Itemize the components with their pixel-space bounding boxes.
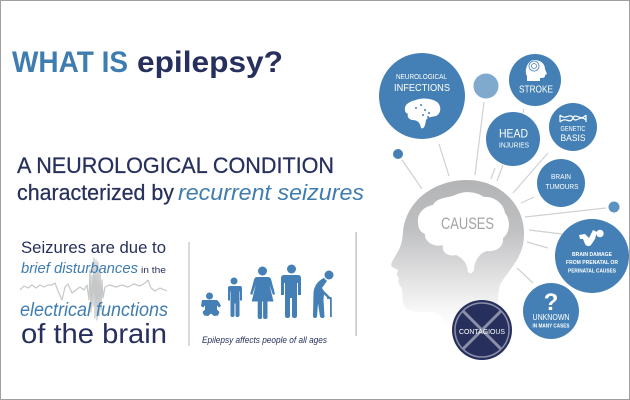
icon: elderly person bbox=[313, 270, 334, 318]
node: unknown bbox=[523, 283, 579, 339]
node: brain damage bbox=[555, 219, 629, 293]
icon: baby bbox=[201, 292, 221, 316]
subtitle: recurrent seizures bbox=[178, 180, 364, 205]
node: neurological infections: INFECTIONS bbox=[394, 82, 450, 94]
title bbox=[12, 46, 283, 79]
node: genetic basis: BASIS bbox=[560, 133, 586, 144]
radiating lines bbox=[402, 102, 606, 283]
node: brain tumours bbox=[537, 159, 585, 207]
node: brain tumours: TUMOURS bbox=[546, 184, 579, 191]
node: brain tumours: BRAIN bbox=[551, 174, 571, 181]
causes label: CAUSES bbox=[441, 215, 494, 233]
caption: Epilepsy affects people of all ages bbox=[202, 335, 327, 346]
seizures text block: electrical functions bbox=[20, 300, 168, 321]
node: small light circle bbox=[474, 74, 498, 98]
subtitle: A NEUROLOGICAL CONDITION bbox=[17, 153, 334, 178]
title: epilepsy? bbox=[137, 46, 283, 79]
node: head injuries bbox=[486, 112, 540, 166]
node: brain damage: FROM PRENATAL OR bbox=[566, 260, 618, 266]
icon: infant bbox=[579, 230, 604, 246]
head silhouette bbox=[391, 180, 524, 325]
icon: dna bbox=[560, 115, 586, 122]
node: neurological infections: NEUROLOGICAL bbox=[396, 74, 447, 81]
icon: brain bbox=[405, 99, 440, 128]
subtitle bbox=[17, 153, 364, 205]
node: not contagious: CONTAGIOUS bbox=[459, 327, 505, 336]
seizures text block: in the bbox=[141, 265, 166, 276]
node: head injuries: INJURIES bbox=[499, 140, 529, 150]
node: brain damage: BRAIN DAMAGE bbox=[572, 252, 613, 258]
node: unknown: UNKNOWN bbox=[532, 313, 570, 322]
node: unknown: IN MANY CASES bbox=[532, 324, 570, 330]
seizures text block bbox=[20, 238, 168, 349]
icons: people of all ages bbox=[201, 264, 334, 319]
node: head injuries: HEAD bbox=[499, 126, 528, 140]
node: unknown: ? bbox=[544, 289, 558, 316]
node: genetic basis: GENETIC bbox=[560, 126, 586, 133]
seizures text block: of the brain bbox=[21, 318, 167, 349]
seizures text block: brief disturbances bbox=[21, 260, 138, 277]
node: not contagious bbox=[452, 300, 512, 360]
node: small dot left bbox=[393, 149, 403, 159]
icon: child bbox=[228, 278, 242, 317]
subtitle: characterized by bbox=[17, 180, 174, 205]
EEG wave bbox=[20, 258, 167, 320]
node: genetic basis bbox=[549, 103, 597, 151]
node: small dot right bbox=[608, 202, 620, 212]
icon: woman bbox=[250, 266, 275, 319]
node: brain damage: PERINATAL CAUSES bbox=[568, 268, 617, 274]
icon: head with target bbox=[526, 60, 547, 81]
seizures text block: Seizures are due to bbox=[21, 238, 166, 257]
icon: man bbox=[281, 264, 301, 318]
node: neurological infections bbox=[379, 53, 465, 139]
title: WHAT IS bbox=[12, 46, 128, 79]
node: stroke bbox=[509, 54, 561, 106]
brain outline bbox=[418, 192, 509, 273]
node: stroke: STROKE bbox=[519, 84, 553, 96]
